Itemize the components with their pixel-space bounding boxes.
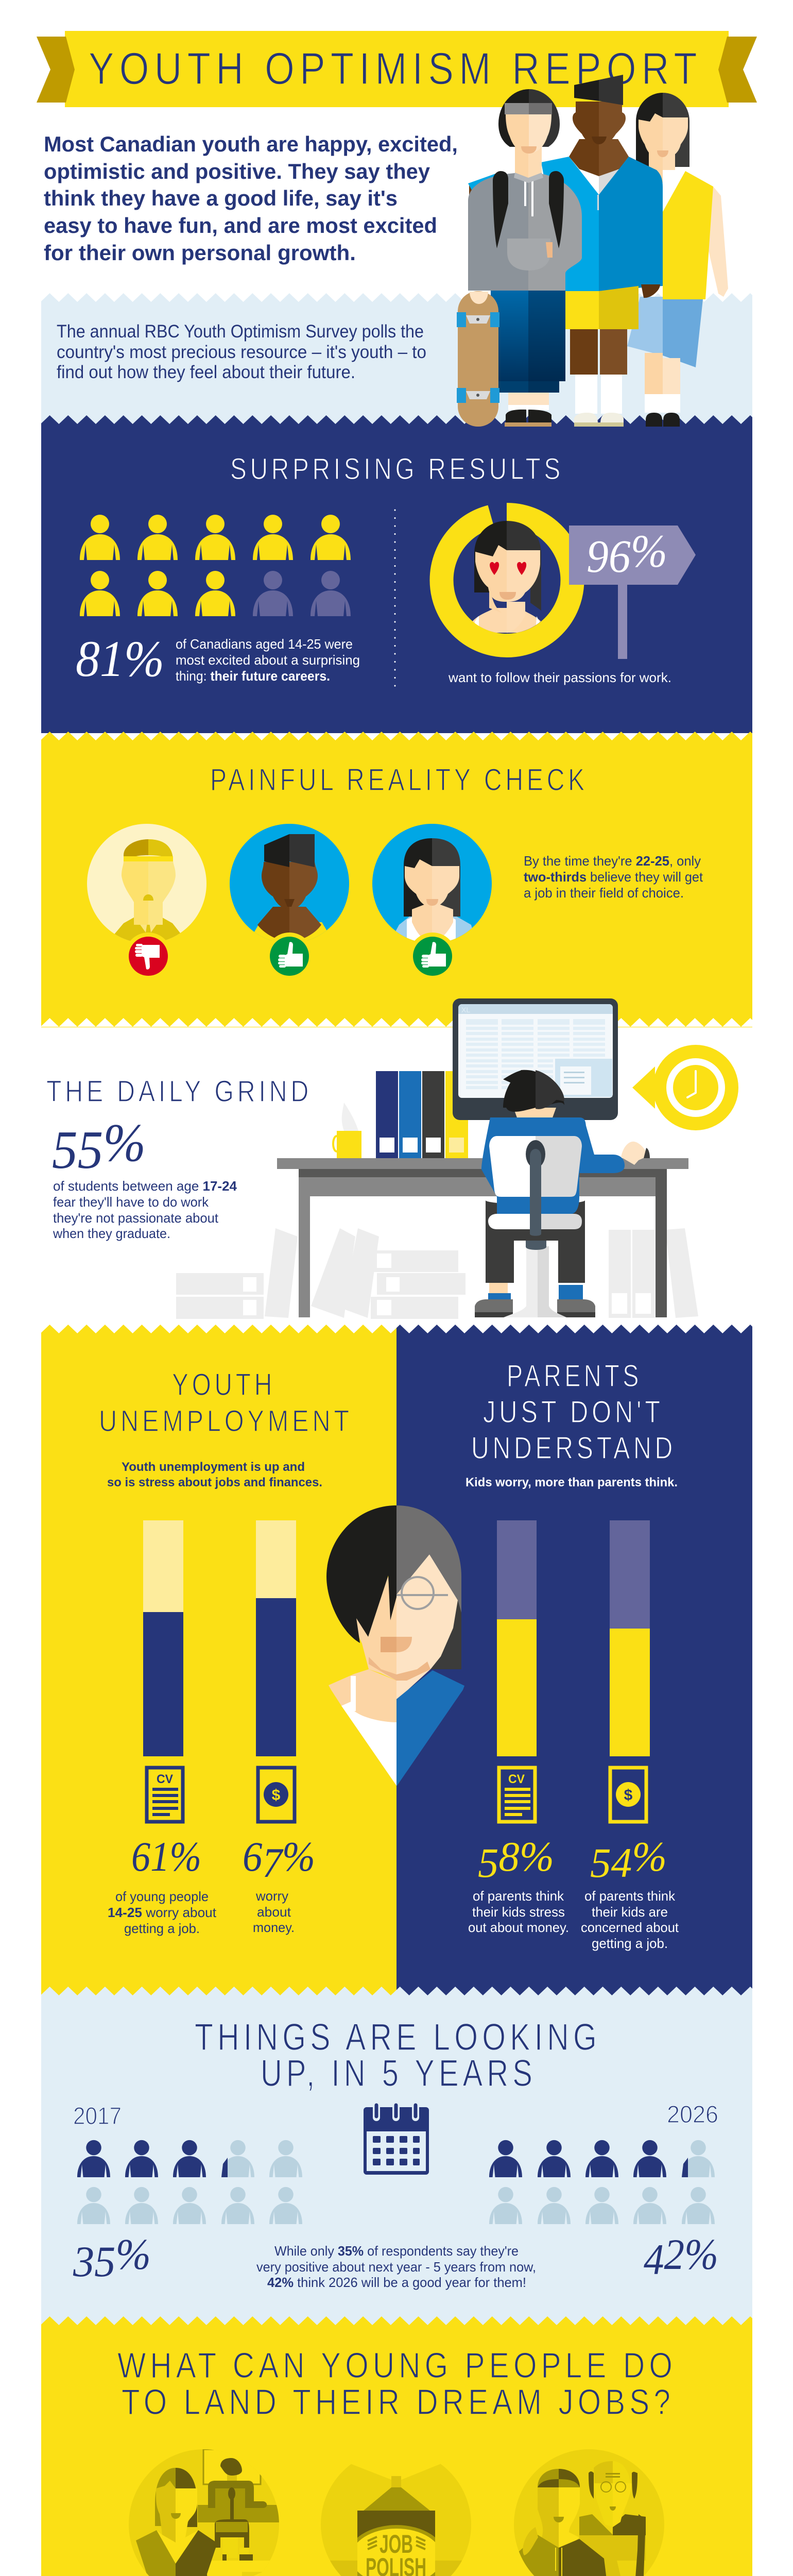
comparison text: very positive about next year - 5 years from now, <box>256 2259 536 2275</box>
stat description: fear they'll have to do work <box>53 1194 209 1210</box>
icon grid: 8 of 10 people <box>80 515 351 616</box>
icon: get experience <box>129 2449 279 2576</box>
stat description: concerned about job <box>581 1888 679 1951</box>
icon: be polished: JOB <box>380 2530 413 2558</box>
speech bubble with clock <box>632 1045 738 1130</box>
signpost 96%: % <box>631 526 667 577</box>
girl <box>627 93 728 427</box>
stat: 61%: 61% <box>131 1833 201 1880</box>
intro statement: Most Canadian youth are happy, excited, <box>44 132 458 156</box>
stat: 67%: % <box>282 1833 315 1880</box>
icon grid: 2026 people <box>489 2140 715 2224</box>
survey description: find out how they feel about their future. <box>57 362 355 382</box>
bar chart: youth worry <box>143 1520 296 1756</box>
stat: 55%: 55 <box>52 1120 103 1180</box>
icon: calendar <box>364 2105 429 2175</box>
stat description: most excited about a surprising <box>176 652 360 668</box>
panel: things are looking up <box>41 1987 752 2326</box>
intro statement: for their own personal growth. <box>44 241 356 265</box>
icon grid: 2017 people <box>77 2140 302 2224</box>
icon: CV document <box>147 1768 183 1822</box>
stat description: job worry: 14-25 worry about <box>108 1905 217 1920</box>
stat: 54%: 54 <box>590 1839 632 1886</box>
icon: money: $ <box>624 1787 633 1804</box>
field of choice text <box>524 853 703 901</box>
heading: JUST DON'T <box>483 1395 664 1429</box>
heading: WHAT CAN YOUNG PEOPLE DO <box>117 2345 677 2385</box>
dotted divider <box>394 510 395 692</box>
panel: survey intro <box>41 293 752 423</box>
heading: UNEMPLOYMENT <box>99 1404 353 1438</box>
stat: 55%: % <box>103 1112 146 1173</box>
survey description <box>57 321 426 382</box>
heading: PAINFUL REALITY CHECK <box>210 762 588 797</box>
badge: thumbs up <box>266 933 313 980</box>
stat description: concerned about job: of parents think <box>584 1888 676 1904</box>
monitor: XL <box>461 1006 470 1014</box>
heading <box>471 1359 676 1465</box>
badge: thumbs down <box>125 933 172 980</box>
stat description: stress about money: of parents think <box>473 1888 564 1904</box>
heading: THINGS ARE LOOKING <box>195 2016 601 2058</box>
heading: PARENTS <box>507 1359 642 1393</box>
ghost binders on the floor <box>176 1228 698 1319</box>
skateboard <box>457 291 499 427</box>
field of choice text: By the time they're 22-25, only <box>524 853 701 869</box>
intro statement: optimistic and positive. They say they <box>44 159 430 183</box>
stat description <box>176 636 360 684</box>
stat description: money worry <box>253 1888 295 1935</box>
stat description: stress about money: their kids stress <box>472 1904 565 1920</box>
stat: 81%: 81% <box>76 630 164 687</box>
sub-heading: Kids worry, more than parents think. <box>466 1476 678 1489</box>
office worker from behind <box>475 1070 650 1317</box>
heading: SURPRISING RESULTS <box>230 452 564 486</box>
comparison text: While only 35% of respondents say they're <box>274 2243 519 2259</box>
heading: UNDERSTAND <box>471 1431 676 1465</box>
young man in hoodie <box>468 89 582 427</box>
panel: painful reality check <box>41 732 752 1027</box>
stat description: stress about money <box>468 1888 569 1935</box>
label: 2026: 2026 <box>667 2100 718 2128</box>
portrait: young woman with thumbs up <box>372 824 492 941</box>
stat description <box>53 1178 237 1241</box>
heading: UP, IN 5 YEARS <box>261 2053 537 2094</box>
comparison text: 42% think 2026 will be a good year for them! <box>267 2275 526 2290</box>
panel: youth unemployment (yellow half) <box>41 1325 396 1995</box>
survey description: country's most precious resource – it's youth – to <box>57 342 426 362</box>
heading: YOUTH <box>172 1367 275 1402</box>
stat: 58%: 5 <box>478 1839 498 1886</box>
stat description: of students between age 17-24 <box>53 1178 237 1194</box>
icon: CV document: CV <box>508 1772 525 1786</box>
field of choice text: a job in their field of choice. <box>524 885 684 901</box>
title banner <box>37 31 757 107</box>
heading <box>195 2016 601 2094</box>
stat description: money worry: worry <box>255 1888 288 1904</box>
panel: what can young people do <box>41 2316 752 2576</box>
intro statement: easy to have fun, and are most excited <box>44 213 437 238</box>
stat: 42%: 4 <box>644 2235 664 2284</box>
portrait: young person with thumbs down <box>87 824 206 941</box>
icon: money <box>610 1768 646 1822</box>
stat description: job worry <box>108 1889 217 1936</box>
stat: 42%: 2% <box>664 2230 718 2279</box>
central half-and-half portrait <box>326 1505 464 1786</box>
stat: 67%: 6 <box>243 1833 264 1880</box>
donut: 96% with girl with heart eyes <box>442 499 573 646</box>
stat: 67%: 7 <box>262 1839 284 1886</box>
stat description: thing: their future careers. <box>176 668 330 684</box>
stat description: concerned about job: concerned about <box>581 1920 679 1935</box>
sub-heading: Youth unemployment is up and <box>122 1460 305 1474</box>
stat description: when they graduate. <box>53 1226 170 1241</box>
icon: find help <box>514 2449 664 2576</box>
heading: THE DAILY GRIND <box>46 1075 312 1108</box>
stat description: stress about money: out about money. <box>468 1920 569 1935</box>
panel: parents just don't understand (navy half) <box>396 1325 752 1995</box>
field of choice text: two-thirds believe they will get <box>524 869 703 885</box>
survey description: The annual RBC Youth Optimism Survey polls the <box>57 321 424 342</box>
heading <box>117 2345 677 2422</box>
icon: CV document <box>499 1768 535 1822</box>
badge: thumbs up <box>409 933 456 980</box>
binders <box>376 1071 468 1158</box>
portrait: young man with thumbs up <box>230 824 349 941</box>
passions caption: want to follow their passions for work. <box>448 670 671 685</box>
heading: TO LAND THEIR DREAM JOBS? <box>122 2382 675 2422</box>
stat description: job worry: of young people <box>115 1889 209 1904</box>
three young people illustration <box>457 75 728 427</box>
intro statement <box>44 132 458 265</box>
young man in blue vest <box>468 75 663 427</box>
title: YOUTH OPTIMISM REPORT <box>89 44 702 94</box>
heading <box>99 1367 353 1438</box>
icon: money <box>258 1768 295 1822</box>
stat description: money worry: about <box>257 1904 291 1920</box>
panel: daily grind <box>46 998 738 1319</box>
stat description: concerned about job: their kids are <box>592 1904 668 1920</box>
stat description: of Canadians aged 14-25 were <box>176 636 353 652</box>
icon: be polished <box>321 2464 471 2576</box>
sub-heading <box>107 1460 322 1489</box>
icon: CV document: CV <box>157 1772 173 1786</box>
stat description: concerned about job: getting a job. <box>592 1936 668 1951</box>
stat description: money worry: money. <box>253 1920 295 1935</box>
desk <box>277 1158 688 1317</box>
stat description: they're not passionate about <box>53 1210 219 1226</box>
signpost 96%: 96 <box>587 531 631 582</box>
intro statement: think they have a good life, say it's <box>44 186 398 210</box>
panel: surprising results <box>41 415 752 733</box>
monitor <box>453 998 618 1120</box>
label: 2017: 2017 <box>73 2102 122 2129</box>
stat description: job worry: getting a job. <box>124 1921 200 1936</box>
sub-heading: so is stress about jobs and finances. <box>107 1476 322 1489</box>
comparison text <box>256 2243 536 2290</box>
signpost 96% <box>569 526 696 659</box>
icon: money: $ <box>272 1787 281 1804</box>
coffee mug <box>333 1103 361 1158</box>
stat: 35%: 35 <box>73 2238 115 2286</box>
stat: 58%: 8% <box>498 1833 554 1880</box>
stat: 54%: % <box>632 1833 667 1880</box>
stat: 35%: % <box>115 2230 151 2279</box>
bar chart: parents think <box>497 1520 650 1756</box>
